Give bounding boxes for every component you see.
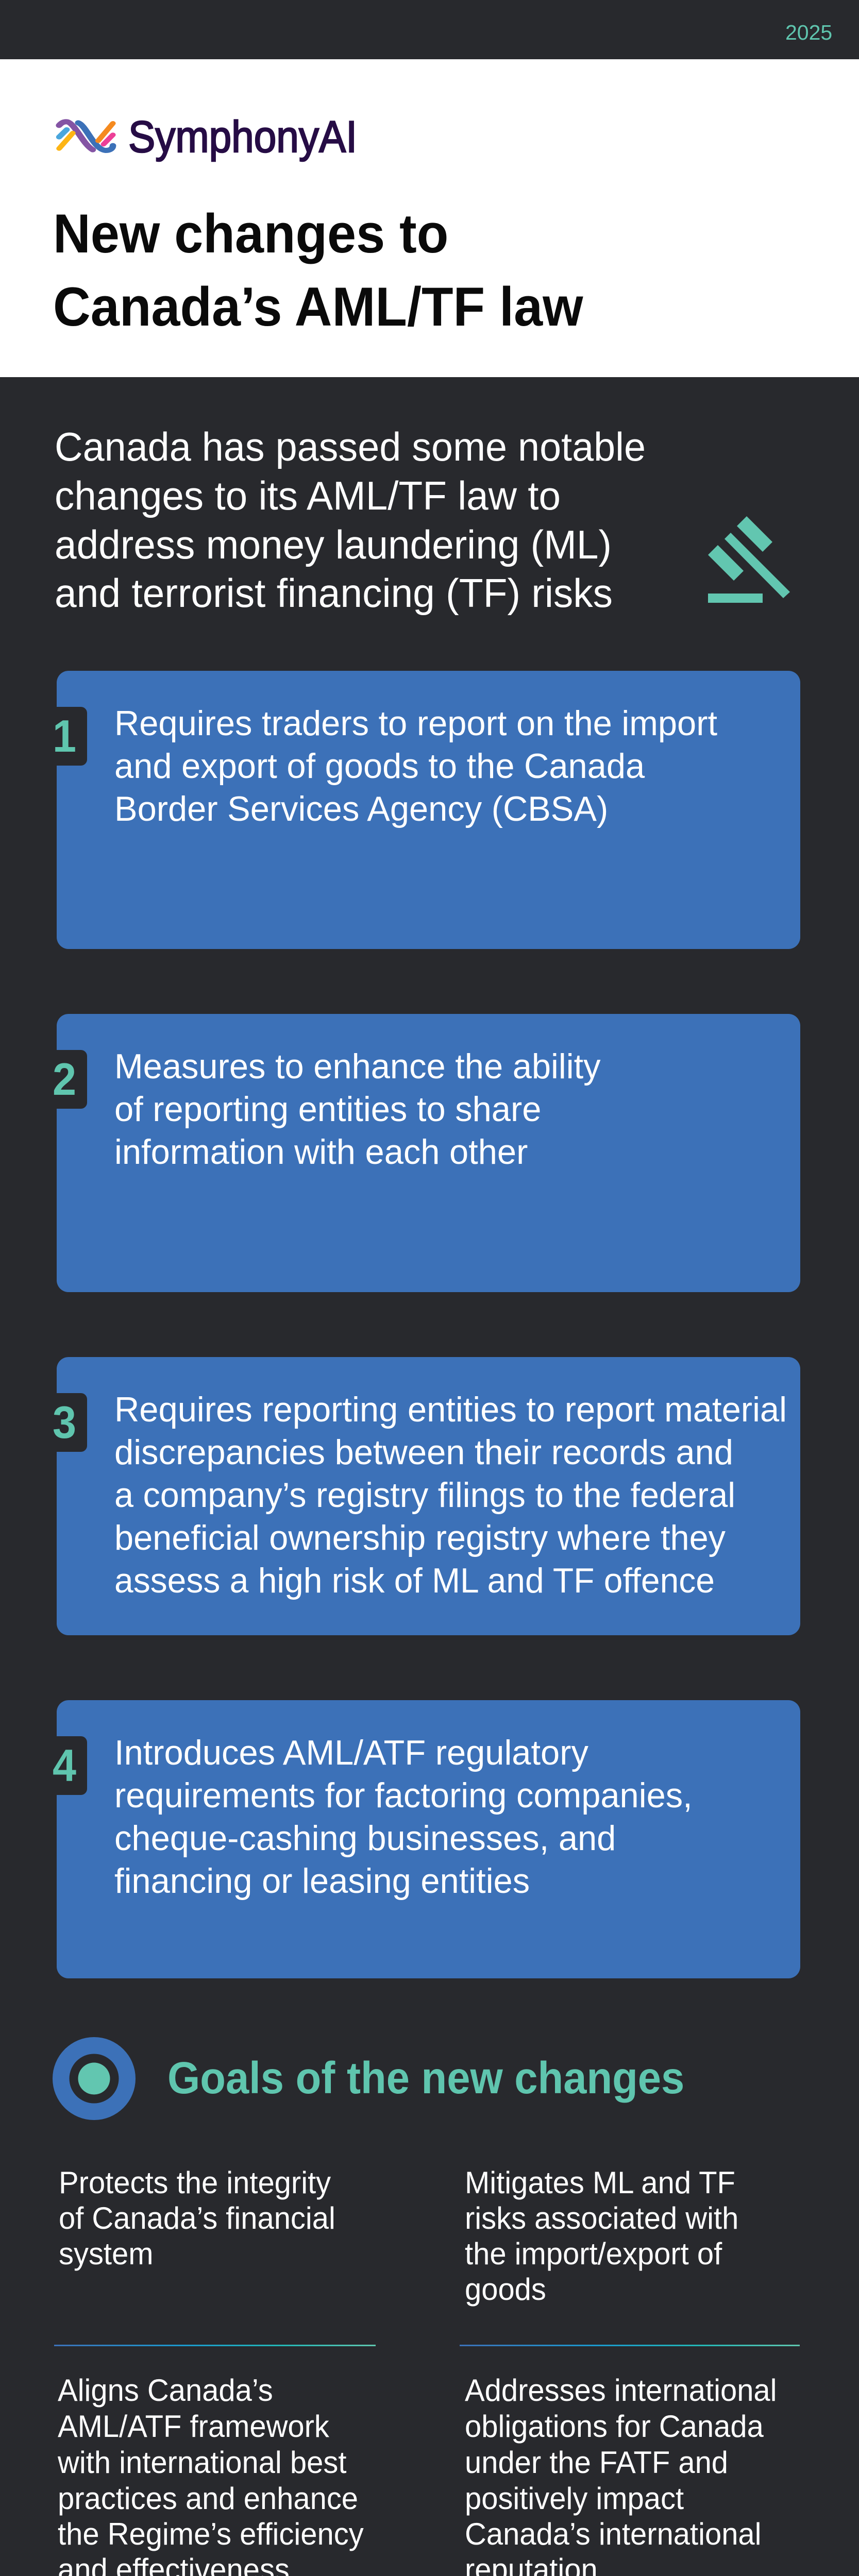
number tab 4 <box>52 1736 87 1795</box>
intro text: Canada has passed some notable <box>55 424 646 469</box>
change 1 text <box>114 704 717 828</box>
goal 3: Aligns Canada’s <box>58 2374 273 2408</box>
change 1 text: and export of goods to the Canada <box>114 747 645 786</box>
change 4 text <box>114 1733 693 1901</box>
number tab 2 <box>52 1050 87 1109</box>
goal 2: goods <box>465 2273 546 2307</box>
change 2 text: of reporting entities to share <box>114 1090 541 1129</box>
change 2 text <box>114 1047 601 1172</box>
goal 4: Canada’s international <box>465 2517 762 2551</box>
change 4 text: Introduces AML/ATF regulatory <box>114 1733 588 1772</box>
number tab 4: 4 <box>53 1741 76 1791</box>
change 3 text: discrepancies between their records and <box>114 1433 733 1472</box>
goal 2: the import/export of <box>465 2237 722 2271</box>
goal 4: under the FATF and <box>465 2446 728 2480</box>
number tab 3 <box>52 1393 87 1452</box>
heading: goals: Goals of the new changes <box>167 2053 684 2103</box>
goal 2: risks associated with <box>465 2201 738 2235</box>
number tab 3: 3 <box>53 1398 76 1448</box>
goal 3: the Regime’s efficiency <box>58 2517 364 2551</box>
intro text: address money laundering (ML) <box>55 522 612 567</box>
change 3 text: Requires reporting entities to report material <box>114 1390 787 1429</box>
change 1 text: Requires traders to report on the import <box>114 704 717 743</box>
goal 3 <box>57 2374 364 2576</box>
intro text: and terrorist financing (TF) risks <box>55 570 613 616</box>
goal 3: practices and enhance <box>58 2482 358 2516</box>
change 1 text: Border Services Agency (CBSA) <box>114 789 608 828</box>
change 4 text: financing or leasing entities <box>114 1861 530 1901</box>
panel: header <box>0 59 859 377</box>
logo: SymphonyAI: SymphonyAI <box>128 112 357 162</box>
title: New changes to <box>53 203 448 265</box>
goal 1: system <box>59 2237 154 2271</box>
goal 4: Addresses international <box>465 2374 777 2408</box>
change 3 text <box>114 1390 787 1600</box>
goal 4: obligations for Canada <box>465 2410 764 2444</box>
change 3 text: beneficial ownership registry where they <box>114 1518 726 1557</box>
goal 1: of Canada’s financial <box>59 2201 335 2235</box>
change 2 text: Measures to enhance the ability <box>114 1047 601 1086</box>
goal 3: with international best <box>57 2446 346 2480</box>
panel: change 3 <box>52 1357 800 1635</box>
year label: 2025 <box>785 21 832 44</box>
title <box>53 203 584 338</box>
number tab 1 <box>52 707 87 766</box>
panel: change 4 <box>52 1700 800 1978</box>
panel: change 1 <box>52 671 800 949</box>
change 2 text: information with each other <box>114 1132 528 1172</box>
change 3 text: a company’s registry filings to the federal <box>114 1476 735 1515</box>
goal 3: AML/ATF framework <box>58 2410 329 2444</box>
goal 1 <box>59 2166 335 2271</box>
icon: target <box>53 2037 136 2120</box>
goal 4 <box>465 2374 777 2576</box>
change 4 text: cheque-cashing businesses, and <box>114 1819 616 1858</box>
goal 1: Protects the integrity <box>59 2166 331 2200</box>
goal 4: positively impact <box>465 2482 684 2516</box>
number tab 1: 1 <box>53 711 76 762</box>
title: Canada’s AML/TF law <box>53 276 584 338</box>
goal 2: Mitigates ML and TF <box>465 2166 735 2200</box>
change 3 text: assess a high risk of ML and TF offence <box>114 1561 715 1600</box>
intro text <box>55 424 646 616</box>
panel: change 2 <box>52 1014 800 1292</box>
goal 2 <box>465 2166 738 2307</box>
number tab 2: 2 <box>53 1055 76 1105</box>
change 4 text: requirements for factoring companies, <box>114 1776 693 1815</box>
icon: gavel <box>708 516 790 603</box>
intro text: changes to its AML/TF law to <box>55 473 561 518</box>
